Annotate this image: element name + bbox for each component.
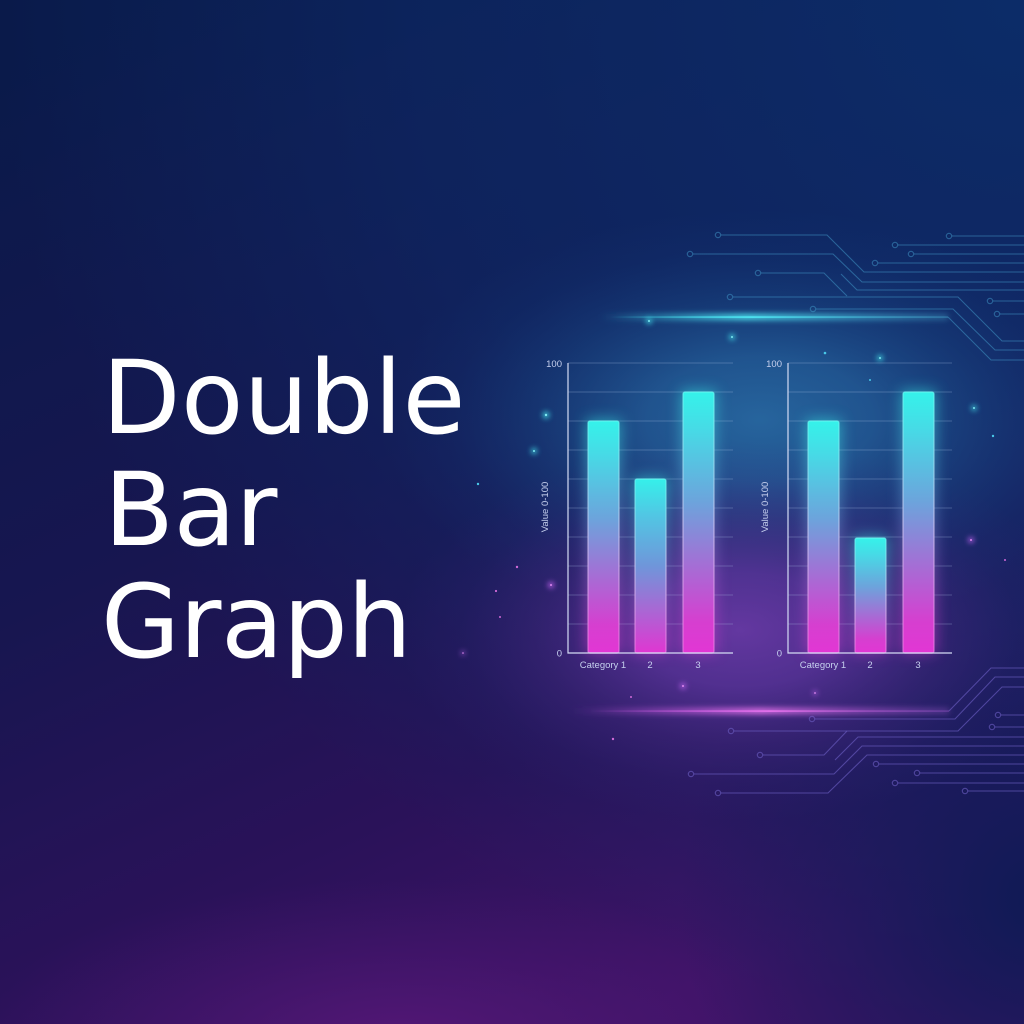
circuit traces: top right (687, 232, 1024, 360)
bar chart: right (760, 359, 952, 671)
axis labels left: 0 (557, 648, 562, 660)
bar: category 1 (808, 421, 839, 653)
particles (461, 318, 1006, 740)
bar: category 2 (635, 479, 666, 653)
bar glows right (806, 390, 936, 653)
gridlines right (788, 363, 952, 624)
axis labels left (540, 359, 701, 671)
title: Bar (104, 451, 277, 570)
axis labels right: Value 0-100 (760, 482, 771, 532)
bar: category 1 (588, 421, 619, 653)
bar: category 2 (855, 538, 886, 653)
axis labels right: 0 (777, 648, 782, 660)
bar: category 3 (683, 392, 714, 653)
title: Double (102, 339, 466, 458)
axes right (788, 363, 952, 653)
axis labels right: Category 1 (800, 660, 846, 671)
title: Graph (101, 563, 411, 682)
bar glows left (586, 390, 716, 653)
bar chart: left (540, 359, 733, 671)
axis labels right: 3 (915, 660, 921, 671)
axis labels left: 2 (647, 660, 653, 671)
magenta light flare (570, 708, 949, 714)
title (101, 339, 466, 682)
axis labels left: Value 0-100 (540, 482, 551, 532)
gridlines left (568, 363, 733, 624)
axis labels left: 3 (695, 660, 701, 671)
axes left (568, 363, 733, 653)
circuit traces: bottom right (688, 668, 1024, 796)
axis labels right: 100 (766, 359, 782, 370)
bar: category 3 (903, 392, 934, 653)
axis labels left: 100 (546, 359, 562, 370)
axis labels right: 2 (867, 660, 873, 671)
axis labels left: Category 1 (580, 660, 626, 671)
cyan light flare (600, 314, 948, 320)
axis labels right (760, 359, 921, 671)
